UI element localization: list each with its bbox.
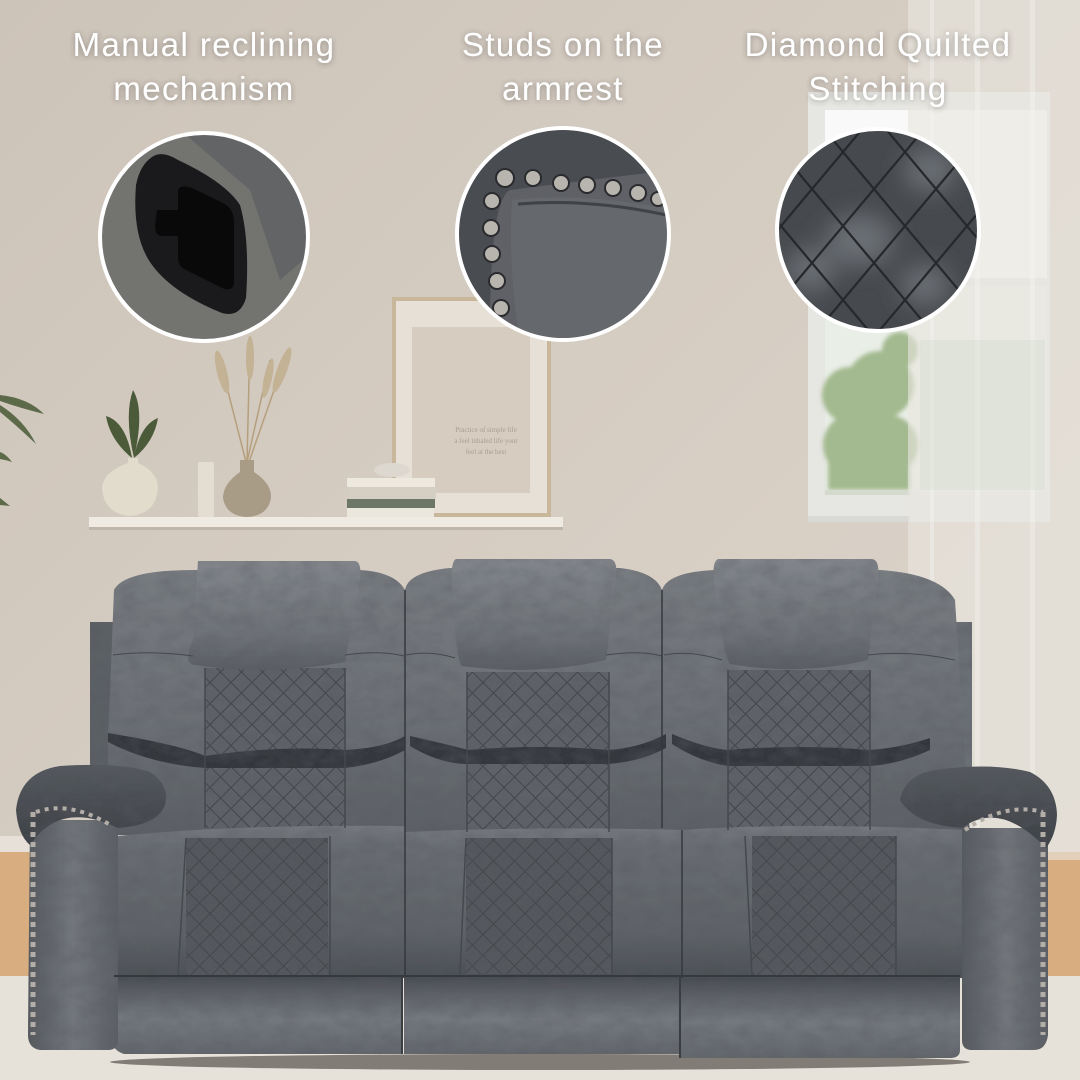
framed art: a feel inhaled life your [454,437,518,445]
nailhead studs [33,808,1043,1035]
potted plant [102,390,158,516]
window [808,92,1050,522]
stitching and cushion seams [113,590,960,1058]
caption: manual reclining mechanism: Manual reclining [73,26,335,63]
vase with dried stems [198,336,295,517]
framed art [392,297,551,517]
caption: manual reclining mechanism: mechanism [113,70,295,107]
headrests [188,561,360,670]
detail circle: diamond quilting [775,127,981,333]
foot rests [112,976,402,1054]
back side panels [90,622,116,770]
caption: studs on the armrest: armrest [502,70,624,107]
caption: diamond quilted stitching: Diamond Quilted [745,26,1011,63]
sheer curtain [908,0,1080,860]
floor [0,852,1080,978]
sofa [16,559,1057,1070]
framed art: feel at the best [466,448,506,456]
quilted seat panels [186,836,896,976]
seat cushions [118,826,405,978]
wall shelf [89,517,563,530]
detail circle: recliner handle [95,130,315,350]
caption: studs on the armrest: Studs on the [462,26,664,63]
quilted back panels [205,668,870,832]
left arm [28,820,118,1050]
rug [0,976,1080,1080]
framed art: Practice of simple life [455,426,517,434]
seat backs [108,570,405,835]
books with bowl [347,463,436,517]
right arm [962,828,1048,1050]
lumbar folds [108,733,405,768]
plant at left edge [0,395,44,506]
detail circle: armrest studs [455,126,671,342]
caption: diamond quilted stitching: Stitching [808,70,948,107]
